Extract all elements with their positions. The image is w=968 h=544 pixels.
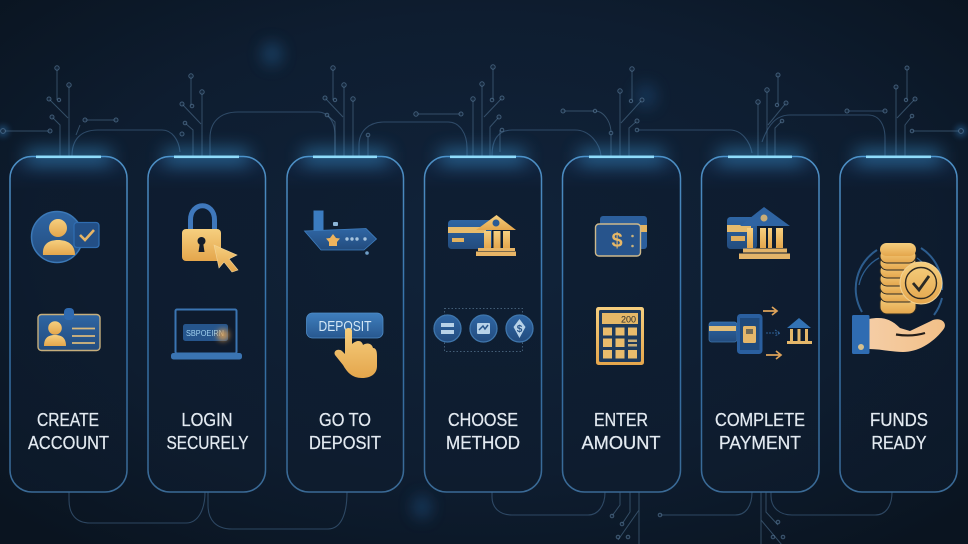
panel: complete payment <box>702 150 819 492</box>
icon: laptop login <box>171 310 242 360</box>
step label <box>582 409 660 453</box>
step label: METHOD <box>446 432 520 453</box>
panel: create account <box>10 150 127 492</box>
panel: funds ready <box>840 150 957 492</box>
circuit lines below the panels <box>69 492 892 544</box>
panel: enter amount <box>562 150 680 492</box>
step label: LOGIN <box>182 409 232 430</box>
step label <box>446 409 520 453</box>
icon: user with check badge <box>32 212 99 262</box>
step label <box>715 409 805 453</box>
icon: hand holding coins <box>852 243 945 354</box>
icon: payment method options <box>434 308 533 352</box>
step label: PAYMENT <box>719 432 801 453</box>
step label: ENTER <box>594 409 648 430</box>
step label <box>166 409 248 453</box>
icon: calculator <box>596 307 644 365</box>
step label: AMOUNT <box>582 432 660 453</box>
step label: FUNDS <box>870 409 928 430</box>
icon: cash notes <box>596 216 647 256</box>
step label: COMPLETE <box>715 409 805 430</box>
step label: SECURELY <box>166 432 248 453</box>
panel: login securely <box>148 150 266 492</box>
step label: ACCOUNT <box>28 432 109 453</box>
icon: id card <box>38 308 100 350</box>
step label <box>870 409 928 453</box>
step label <box>309 409 381 453</box>
icon: card and bank <box>448 215 516 256</box>
step label: READY <box>872 432 926 453</box>
panel: choose method <box>424 150 542 492</box>
icon: padlock with cursor <box>182 206 238 272</box>
icon: payment method options: $ <box>517 324 523 335</box>
icon: deposit button with hand: DEPOSIT <box>318 318 372 335</box>
step label: CREATE <box>37 409 99 430</box>
icon: payment flow <box>709 307 812 359</box>
step label: DEPOSIT <box>309 432 381 453</box>
step label <box>28 409 109 453</box>
icon: calculator: 200 <box>621 314 636 324</box>
circuit lines above the panels <box>1 65 963 156</box>
panel: go to deposit <box>287 150 404 492</box>
icon: deposit button with hand <box>306 313 383 378</box>
step label: GO TO <box>319 409 371 430</box>
icon: card and bank <box>727 207 790 259</box>
step label: CHOOSE <box>448 409 518 430</box>
icon: laptop login: SBPOEIRN <box>186 328 224 338</box>
icon: deposit arrow tag <box>304 210 376 255</box>
icon: cash notes: $ <box>611 230 623 252</box>
